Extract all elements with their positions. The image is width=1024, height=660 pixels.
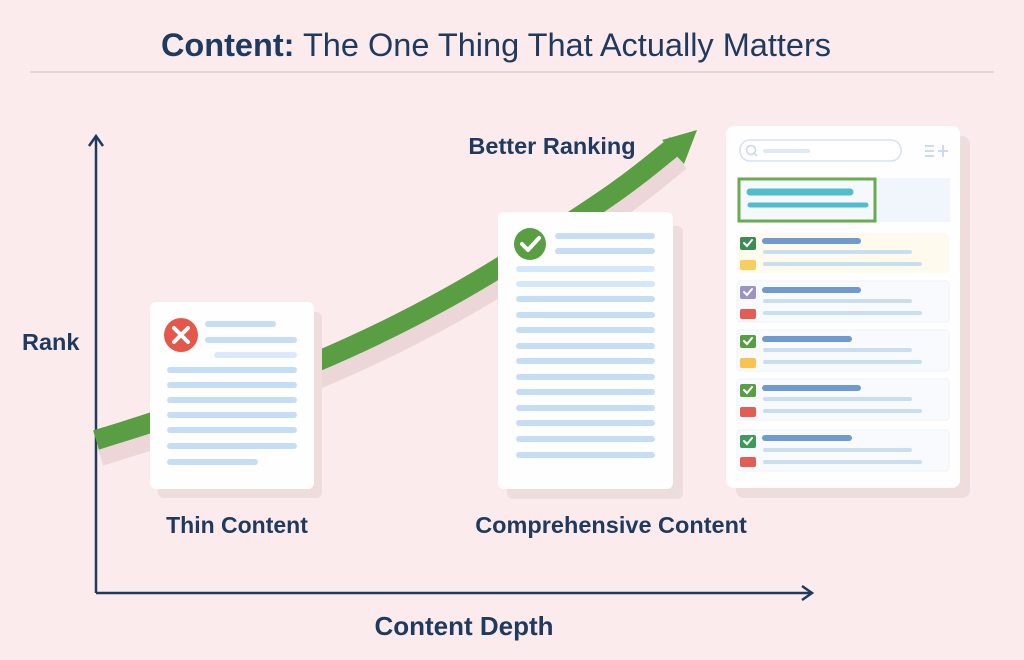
label: thin content: Thin Content xyxy=(166,512,308,538)
label: comprehensive content: Comprehensive Content xyxy=(475,512,747,538)
title: Content: The One Thing That Actually Matters xyxy=(161,27,831,63)
search bar xyxy=(740,140,948,161)
result rows xyxy=(737,233,949,273)
panel: thin content xyxy=(150,302,322,498)
arrow: growth curve xyxy=(96,130,697,455)
top result highlighted xyxy=(738,178,950,222)
icon: red x xyxy=(164,318,198,352)
panel: search results xyxy=(726,126,970,498)
label: better ranking: Better Ranking xyxy=(468,133,636,159)
panel: comprehensive content xyxy=(498,212,683,499)
y axis label: Rank xyxy=(22,329,80,355)
x axis label: Content Depth xyxy=(374,611,554,641)
icon: green check xyxy=(514,228,546,260)
axes xyxy=(89,136,812,600)
